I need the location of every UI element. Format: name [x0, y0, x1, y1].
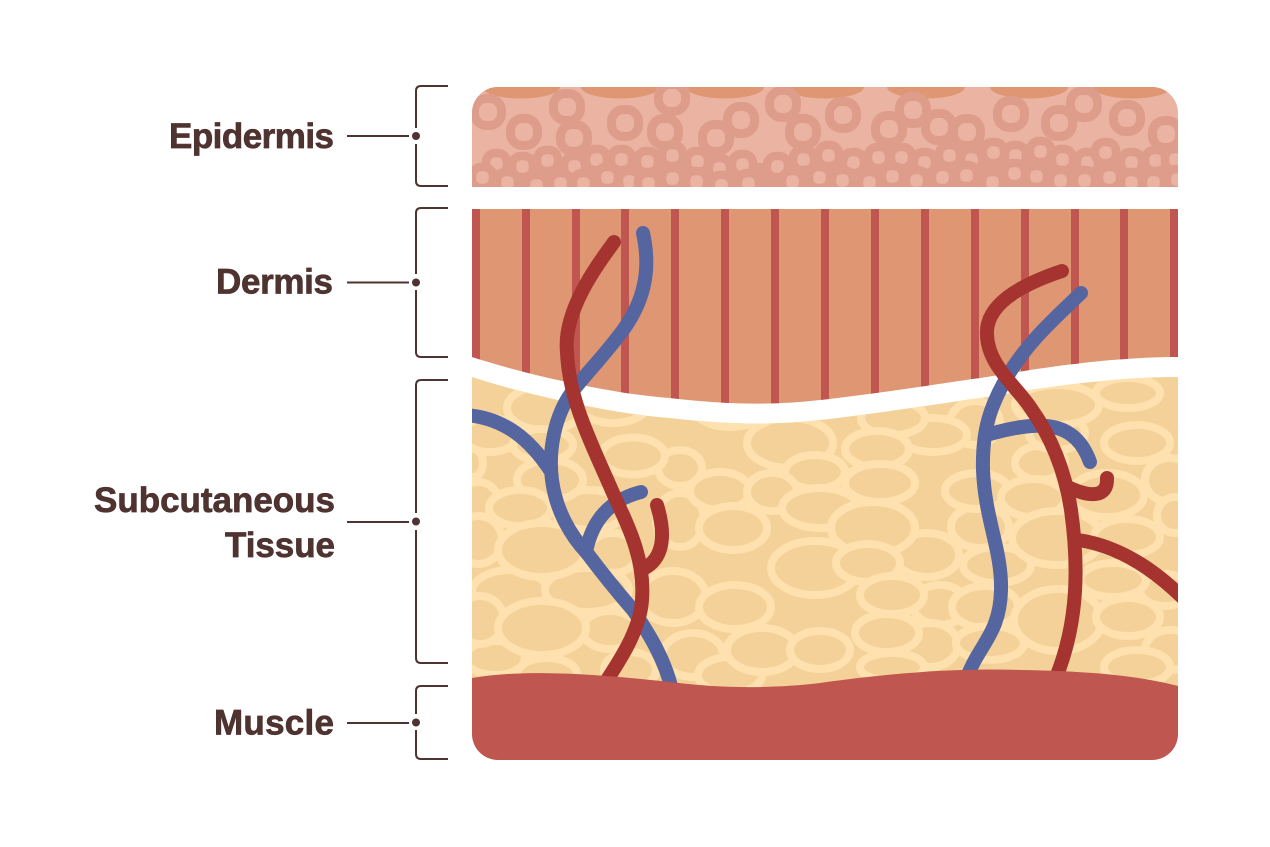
panel: subcutaneous fat layer	[472, 377, 1178, 688]
right vein	[966, 293, 1081, 680]
left vein short branch	[586, 492, 641, 552]
blue veins	[466, 233, 1090, 690]
left vein	[551, 233, 672, 690]
panel: epidermis layer	[472, 87, 1178, 187]
label: Dermis: Dermis	[216, 262, 333, 302]
right artery	[987, 271, 1076, 680]
label: Epidermis: Epidermis	[169, 117, 334, 156]
large skin cell rings	[474, 84, 1180, 152]
blood vessels	[466, 233, 1185, 690]
small skin cell rings	[472, 141, 1188, 196]
left artery	[567, 242, 642, 680]
left vein branch from edge	[466, 415, 550, 470]
fat cells: front layer	[489, 378, 1170, 693]
right artery short branch	[1070, 478, 1107, 494]
label: Subcutaneous Tissue: Subcutaneous	[94, 481, 335, 520]
panel: dermis layer	[472, 209, 1178, 409]
right artery long branch	[1078, 540, 1185, 600]
collagen stripes	[472, 209, 1178, 409]
right vein branch	[990, 426, 1090, 462]
label: Epidermis	[169, 86, 448, 186]
label: Subcutaneous Tissue: Tissue	[225, 526, 335, 565]
red arteries	[567, 242, 1185, 680]
top dermis-coloured patches	[484, 87, 1168, 98]
left artery branch	[645, 505, 662, 568]
fat cells: back layer	[454, 383, 1195, 690]
label: Dermis	[216, 208, 448, 357]
label: Subcutaneous Tissue	[94, 380, 448, 663]
label: Muscle: Muscle	[214, 704, 334, 742]
label: Muscle	[214, 686, 448, 759]
panel: muscle layer	[472, 660, 1178, 760]
solid base under small cells	[662, 163, 1117, 187]
